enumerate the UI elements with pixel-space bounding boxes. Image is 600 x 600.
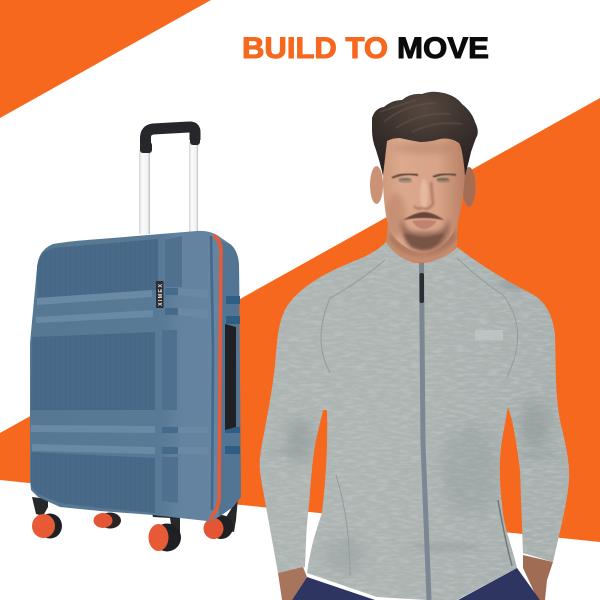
jacket shading: [265, 280, 558, 573]
hair highlights: [380, 100, 462, 132]
shell seam: [211, 236, 213, 510]
ribbed panel: middle front: [31, 332, 155, 410]
background: orange diagonal band: [0, 98, 600, 542]
suitcase shell: [30, 231, 241, 521]
right hand: [523, 555, 553, 600]
grey jacket: [250, 235, 580, 600]
title: [242, 32, 489, 65]
title: BUILD TO: [242, 32, 388, 65]
side carry handle: [225, 324, 236, 430]
raised horizontal bands: [31, 288, 208, 454]
face: [383, 138, 465, 252]
background: top-left orange triangle: [0, 0, 211, 118]
wheels: [32, 497, 238, 552]
side face: [219, 241, 241, 517]
ribbed panel: upper front: [37, 239, 158, 298]
chest logo: [475, 330, 503, 340]
zipper: [422, 263, 429, 600]
zipper pull: [420, 273, 424, 303]
ribbed panels: corner column: [162, 236, 182, 503]
title: MOVE: [397, 32, 489, 65]
facial features: [392, 174, 456, 229]
brand tag: [156, 281, 164, 308]
orange zip stripe: [210, 235, 221, 519]
telescopic handle: [139, 127, 200, 234]
navy trousers: [292, 568, 540, 600]
ribbed panel: lower front: [31, 452, 155, 513]
suitcase: [30, 127, 241, 551]
side face dark bands: [225, 296, 240, 454]
neck shadow: [390, 225, 456, 256]
hair: [372, 92, 478, 176]
beard stubble: [401, 218, 450, 252]
raglan seams: [321, 258, 518, 575]
ears: [370, 166, 476, 207]
brand tag: XIMEX: [158, 284, 164, 306]
left hand: [278, 567, 307, 600]
man: [250, 92, 580, 600]
neck: [386, 215, 458, 262]
corner column dark band gaps: [162, 288, 178, 454]
